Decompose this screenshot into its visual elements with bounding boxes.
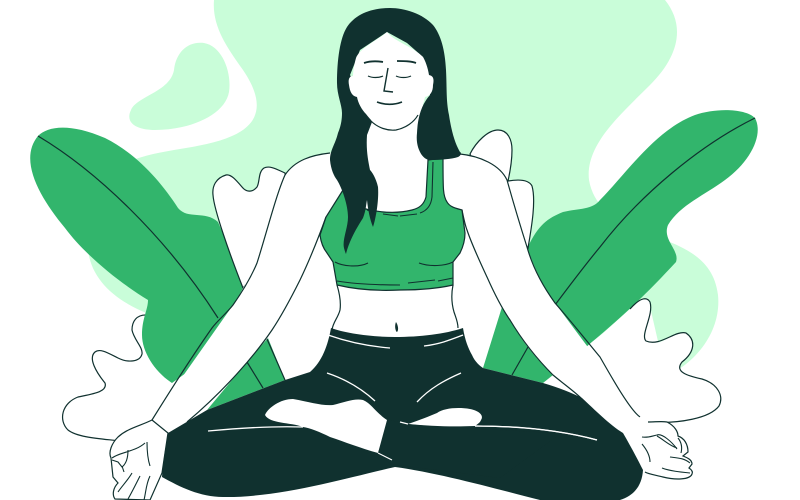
waist lines <box>332 285 458 330</box>
closed eyes <box>368 76 411 78</box>
leaf vein <box>555 118 755 305</box>
legging highlights <box>208 335 597 440</box>
face <box>349 32 434 130</box>
background blob: large pale green <box>87 0 718 400</box>
navel <box>395 322 398 332</box>
white leaf: behind right shoulder <box>470 130 534 248</box>
right hand <box>623 417 692 479</box>
front shin cuff <box>378 420 560 478</box>
right green leaf <box>500 110 758 372</box>
dark leggings <box>162 328 643 500</box>
nose <box>384 68 393 92</box>
leaf vein <box>38 136 218 318</box>
left green leaf <box>30 128 260 383</box>
bare feet <box>265 399 482 453</box>
white leaf: behind left arm <box>213 167 290 288</box>
white leaf edge line <box>630 299 721 422</box>
white leaf: bottom left <box>63 315 190 441</box>
mouth <box>377 102 402 104</box>
green leaf strip: right of torso <box>483 307 553 383</box>
hair <box>330 8 461 254</box>
white leaf fill: bottom right <box>550 298 660 424</box>
background blob: small pale green <box>129 43 230 130</box>
cuff line <box>378 422 597 460</box>
neck <box>345 105 432 215</box>
green leaf strip: left of torso <box>207 338 285 410</box>
green sports top <box>320 158 465 290</box>
top seams <box>335 162 453 285</box>
white leaf: bottom right body <box>590 299 721 422</box>
chin line <box>371 115 418 130</box>
left arm lines <box>152 153 330 422</box>
right arm lines <box>460 154 640 417</box>
eyebrows <box>364 61 416 63</box>
left hand <box>110 420 168 500</box>
white body and gaps <box>152 153 645 473</box>
